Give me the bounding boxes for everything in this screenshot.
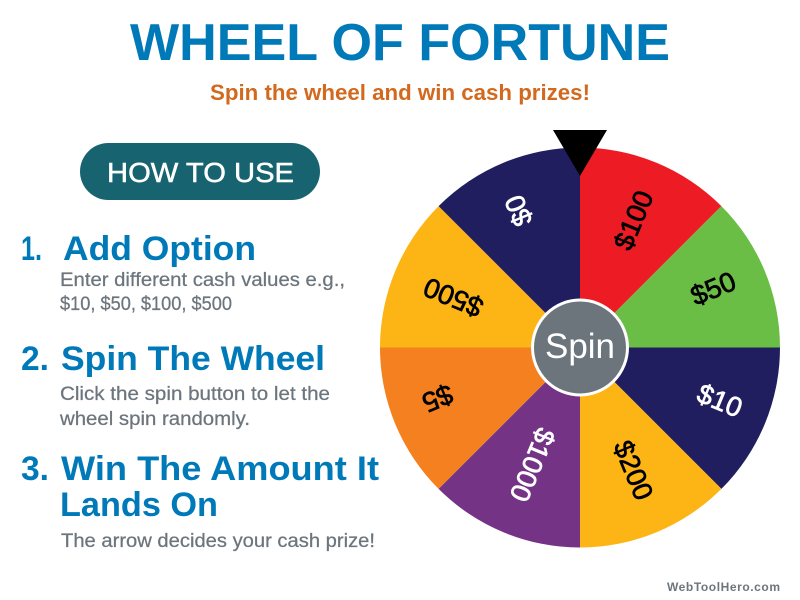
footer credit: WebToolHero.com <box>667 580 780 594</box>
slice: $5: $5 <box>418 378 458 419</box>
step 1: 1. <box>21 230 42 268</box>
step 1 <box>21 230 345 315</box>
slice: $50: $50 <box>686 265 740 312</box>
step 1: Add Option <box>63 230 256 268</box>
step 3 <box>21 450 379 552</box>
title: WHEEL OF FORTUNE <box>130 14 670 72</box>
step 2: 2. <box>21 340 49 378</box>
slice: $100: $100 <box>607 186 659 254</box>
step 3: Lands On <box>60 486 218 524</box>
slice: $50 <box>580 206 780 348</box>
pointer arrow <box>553 130 607 176</box>
slice: $0: $0 <box>498 191 539 231</box>
slice: $10 <box>580 348 780 489</box>
slice: $10: $10 <box>693 377 747 424</box>
prize wheel <box>380 148 780 548</box>
step 2: Click the spin button to let the <box>60 384 330 405</box>
step 2: wheel spin randomly. <box>59 409 250 430</box>
step 2 <box>21 340 330 430</box>
slice: $500: $500 <box>419 272 487 324</box>
slice: $1000 <box>439 348 580 548</box>
spin button <box>532 300 628 395</box>
step 3: The arrow decides your cash prize! <box>61 531 375 552</box>
step 2: Spin The Wheel <box>61 340 325 378</box>
slice: $1000: $1000 <box>504 424 561 506</box>
how to use button: HOW TO USE <box>107 157 294 188</box>
how to use button <box>80 143 320 200</box>
step 3: 3. <box>21 450 49 488</box>
step 1: Enter different cash values e.g., <box>60 270 345 291</box>
slice: $100 <box>580 148 721 348</box>
slice: $500 <box>380 206 580 348</box>
slice: $5 <box>380 348 580 489</box>
slice: $0 <box>439 148 580 348</box>
step 1: $10, $50, $100, $500 <box>60 294 232 315</box>
slice: $200: $200 <box>608 436 660 504</box>
spin button: Spin <box>545 327 615 366</box>
slice: $200 <box>580 348 721 548</box>
subtitle: Spin the wheel and win cash prizes! <box>210 80 590 105</box>
step 3: Win The Amount It <box>61 450 379 488</box>
